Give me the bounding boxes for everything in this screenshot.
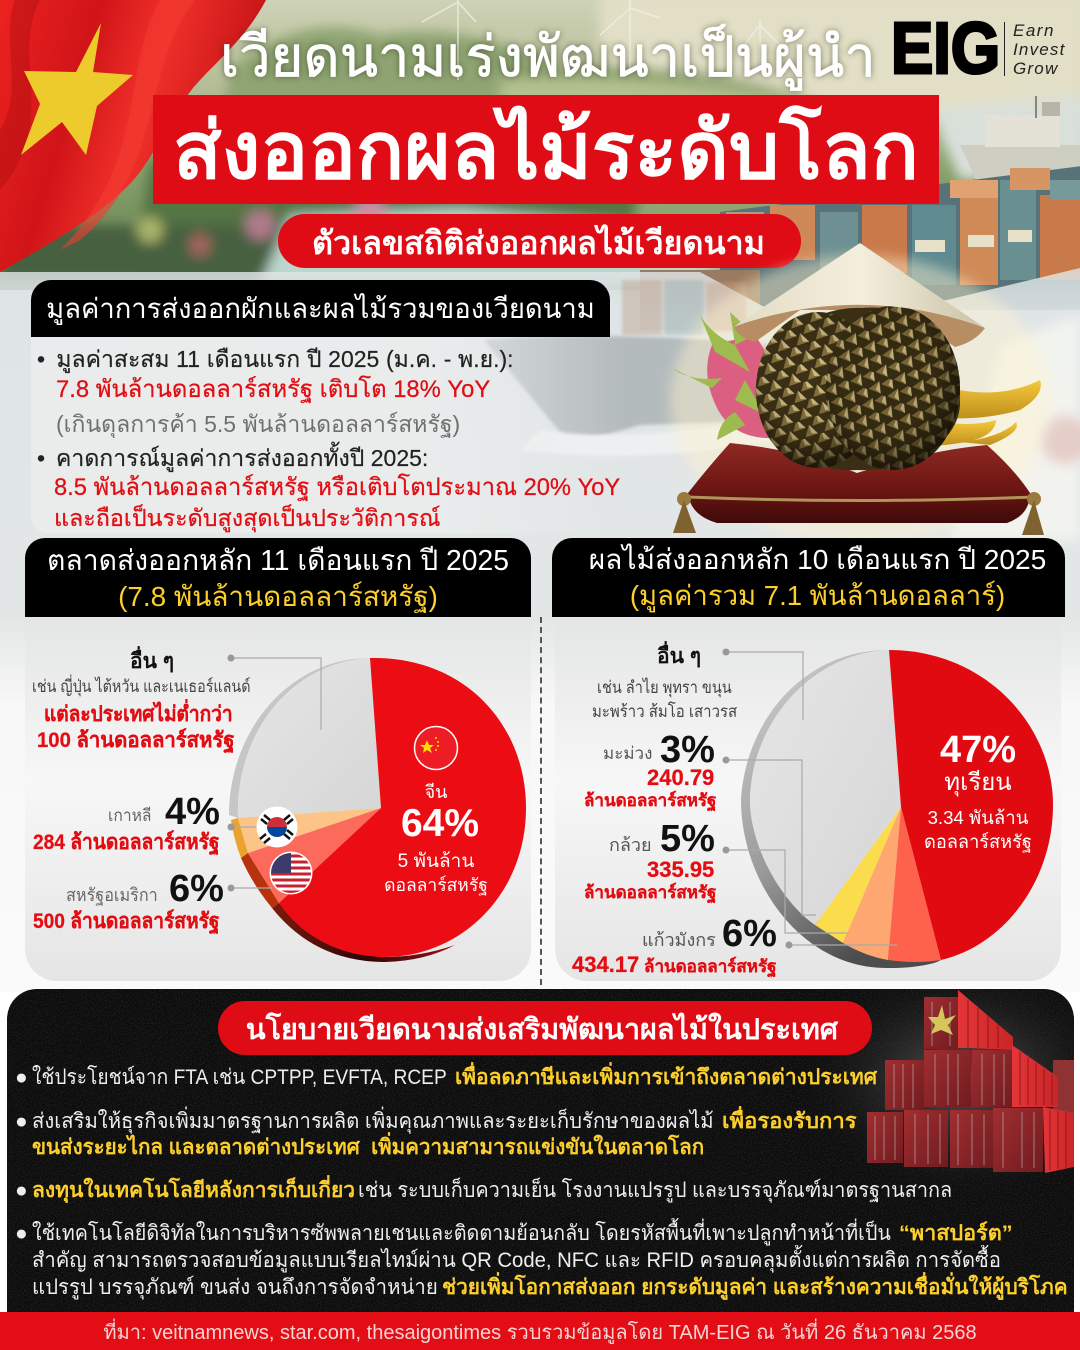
ship superstructure <box>960 96 1080 200</box>
text: others examples: เช่น ญี่ปุ่น ไต้หวัน และเนเธอร์แลนด์ <box>32 677 250 696</box>
bullet 4: ใช้เทคโนโลยีดิจิทัลในการบริหารซัพพลายเชนและติดตามย้อนกลับ โดยรหัสพื้นที่เพาะปลูกทำหน้าที่เป็น <box>32 1222 891 1245</box>
logo: EIG Earn Invest Grow: Grow <box>1013 59 1058 78</box>
pie depth rim <box>229 658 370 818</box>
bananas <box>925 380 1041 446</box>
pillow <box>673 443 1044 535</box>
heading: export fruits: (มูลค่ารวม 7.1 พันล้านดอลลาร์) <box>630 580 1005 611</box>
bullet 3 <box>15 1175 952 1203</box>
heading: total export value: มูลค่าการส่งออกผักและผลไม้รวมของเวียดนาม <box>46 293 595 324</box>
subtitle pill <box>278 214 801 268</box>
heading: policy pill: นโยบายเวียดนามส่งเสริมพัฒนาผลไม้ในประเทศ <box>246 1014 838 1046</box>
text: durian value 2: ดอลลาร์สหรัฐ <box>924 832 1032 852</box>
icon: china flag <box>414 726 458 770</box>
slice: others <box>238 658 381 818</box>
text: usa value: 500 ล้านดอลลาร์สหรัฐ <box>33 910 219 933</box>
heading: total export value <box>31 280 610 337</box>
logo: EIG Earn Invest Grow <box>891 9 1066 89</box>
icon: korea flag <box>256 806 298 848</box>
text: china value: 5 พันล้าน <box>398 851 474 872</box>
text: china value 2: ดอลลาร์สหรัฐ <box>384 875 488 895</box>
number: banana: 5% <box>660 818 715 860</box>
text: others value 2: 100 ล้านดอลลาร์สหรัฐ <box>37 729 235 752</box>
text: forecast value: 8.5 พันล้านดอลลาร์สหรัฐ หรือเติบโตประมาณ 20% YoY <box>54 475 620 501</box>
speckle glow <box>7 989 1074 1312</box>
text: korea value: 284 ล้านดอลลาร์สหรัฐ <box>33 831 219 854</box>
bullet 2: เพื่อรองรับการ <box>722 1110 857 1133</box>
subtitle pill: ตัวเลขสถิติส่งออกผลไม้เวียดนาม <box>312 225 765 261</box>
footer source bar <box>0 1312 1080 1350</box>
slice: korea <box>238 808 381 853</box>
bullet 1: เพื่อลดภาษีและเพิ่มการเข้าถึงตลาดต่างประเทศ <box>455 1066 877 1089</box>
number: mango: 3% <box>660 729 715 771</box>
logo: EIG Earn Invest Grow: Invest <box>1013 40 1066 59</box>
bullet 4: “พาสปอร์ต” <box>899 1222 1013 1245</box>
hat underside <box>733 302 985 347</box>
heading: export markets: (7.8 พันล้านดอลลาร์สหรัฐ) <box>118 581 438 612</box>
heading: export fruits: ผลไม้ส่งออกหลัก 10 เดือนแรก ปี 2025 <box>589 544 1046 575</box>
panel: total export value <box>31 280 620 533</box>
footer source bar: ที่มา: veitnamnews, star.com, thesaigontimes รวบรวมข้อมูลโดย TAM-EIG ณ วันที่ 26 ธันวาคม 2568 <box>103 1322 977 1344</box>
text: dragon fruit value: 434.17 ล้านดอลลาร์สหรัฐ <box>572 952 776 977</box>
slice: mango <box>888 807 941 962</box>
bullet 4 line 3: ช่วยเพิ่มโอกาสส่งออก ยกระดับมูลค่า และสร้างความเชื่อมั่นให้ผู้บริโภค <box>442 1276 1068 1299</box>
policy bullet list <box>15 1062 1068 1300</box>
labels: china slice <box>384 782 488 896</box>
label: others: อื่น ๆ <box>130 650 174 673</box>
text: forecast: • คาดการณ์มูลค่าการส่งออกทั้งปี 2025: <box>37 445 428 471</box>
slice: china <box>279 658 526 957</box>
icon: usa flag <box>270 852 312 894</box>
label: korea: เกาหลี <box>108 806 151 825</box>
label: china: จีน <box>425 782 447 802</box>
text: banana unit: ล้านดอลลาร์สหรัฐ <box>584 883 716 902</box>
labels: fruits chart <box>572 641 777 978</box>
bullet 2 <box>15 1106 857 1134</box>
panel: markets background <box>25 617 531 981</box>
number: usa: 6% <box>169 868 224 910</box>
text: cumulative value: • มูลค่าสะสม 11 เดือนแรก ปี 2025 (ม.ค. - พ.ย.): <box>37 346 514 372</box>
text: others examples: เช่น ลำไย พุทรา ขนุน <box>597 678 732 697</box>
bullet 4 line 3 <box>32 1272 1068 1300</box>
text: record high: และถือเป็นระดับสูงสุดเป็นประวัติการณ์ <box>54 505 440 531</box>
panel: policy <box>7 989 1074 1319</box>
label: durian: ทุเรียน <box>944 769 1012 796</box>
label: others: อื่น ๆ <box>657 645 701 668</box>
conical hat <box>733 243 985 328</box>
washed lower backdrop <box>0 268 1080 620</box>
bullet 3: ● <box>15 1179 28 1202</box>
pie chart: markets <box>228 654 526 962</box>
heading: export markets <box>25 538 531 617</box>
logo: EIG Earn Invest Grow: Earn <box>1013 21 1055 40</box>
number: korea: 4% <box>165 791 220 833</box>
labels: markets chart <box>32 646 250 934</box>
text: banana value: 335.95 <box>647 857 714 882</box>
bullet 1: ใช้ประโยชน์จาก FTA เช่น CPTPP, EVFTA, RCEP <box>32 1066 447 1089</box>
white lower section backdrop <box>0 617 1080 992</box>
dragon fruit <box>672 312 790 440</box>
number: china: 64% <box>401 802 479 845</box>
background scene: landscape, ship, containers <box>0 0 1080 617</box>
bullet 2: ● <box>15 1110 28 1133</box>
bullet 1 <box>15 1062 878 1089</box>
faded ship hull <box>484 280 780 456</box>
title line 1: เวียดนามเร่งพัฒนาเป็นผู้นำ <box>220 25 876 88</box>
vietnam flag curtain <box>0 0 266 272</box>
illustration: durian with hat, dragon fruit, bananas on a pillow <box>666 243 1048 538</box>
bullet 4 line 3: แปรรูป บรรจุภัณฑ์ ขนส่ง จนถึงการจัดจำหน่าย <box>32 1276 438 1299</box>
heading: export fruits <box>552 538 1065 617</box>
bullet 4 line 2: สำคัญ สามารถตรวจสอบข้อมูลแบบเรียลไทม์ผ่าน QR Code, NFC และ RFID ครอบคลุมตั้งแต่การผลิต การจัดซื้อ <box>32 1249 1001 1272</box>
pie depth rim <box>741 650 941 968</box>
text: trade surplus: (เกินดุลการค้า 5.5 พันล้านดอลลาร์สหรัฐ) <box>56 411 460 437</box>
text: others examples 2: มะพร้าว ส้มโอ เสาวรส <box>592 702 737 721</box>
labels: durian slice <box>924 729 1032 853</box>
text: others value: แต่ละประเทศไม่ต่ำกว่า <box>44 703 233 726</box>
label: dragon fruit: แก้วมังกร <box>642 930 716 950</box>
text: mango value: 240.79 <box>647 765 714 790</box>
dashed divider <box>540 617 542 985</box>
slice: dragon fruit <box>815 807 901 943</box>
panel background <box>31 337 625 533</box>
slice: durian <box>889 650 1053 960</box>
panel: fruits background <box>555 617 1061 981</box>
text: cumulative value red: 7.8 พันล้านดอลลาร์สหรัฐ เติบโต 18% YoY <box>56 376 490 403</box>
slice: usa <box>248 808 381 903</box>
slice: others <box>750 650 901 925</box>
label: mango: มะม่วง <box>603 744 652 763</box>
text: mango unit: ล้านดอลลาร์สหรัฐ <box>584 791 716 810</box>
label: banana: กล้วย <box>609 835 652 855</box>
leader lines <box>726 652 897 945</box>
icon: flag star <box>21 23 133 155</box>
wind turbines <box>422 0 780 80</box>
cargo containers <box>640 165 1080 330</box>
bullet 3: ลงทุนในเทคโนโลยีหลังการเก็บเกี่ยว <box>32 1179 355 1202</box>
title banner: ส่งออกผลไม้ระดับโลก <box>173 106 919 195</box>
heading: export markets: ตลาดส่งออกหลัก 11 เดือนแรก ปี 2025 <box>47 544 509 576</box>
bullet 4: ● <box>15 1222 28 1245</box>
bullet 2 line 2: ขนส่งระยะไกล และตลาดต่างประเทศ เพิ่มความสามารถแข่งขันในตลาดโลก <box>32 1136 704 1159</box>
bullet 2: ส่งเสริมให้ธุรกิจเพิ่มมาตรฐานการผลิต เพิ่มคุณภาพและระยะเก็บรักษาของผลไม้ <box>32 1110 714 1133</box>
text: durian value: 3.34 พันล้าน <box>928 807 1028 828</box>
bullet 3: เช่น ระบบเก็บความเย็น โรงงานแปรรูป และบรรจุภัณฑ์มาตรฐานสากล <box>358 1179 952 1202</box>
pie chart: fruits <box>722 648 1053 968</box>
label: usa: สหรัฐอเมริกา <box>66 885 158 905</box>
slice: banana <box>843 807 901 960</box>
number: durian: 47% <box>940 729 1016 771</box>
heading: policy pill <box>218 1001 872 1055</box>
logo: EIG Earn Invest Grow: EIG <box>891 9 1000 89</box>
number: dragon fruit: 6% <box>722 913 777 955</box>
durian <box>756 306 960 470</box>
leader lines <box>232 658 321 888</box>
bullet 1: ● <box>15 1066 28 1089</box>
